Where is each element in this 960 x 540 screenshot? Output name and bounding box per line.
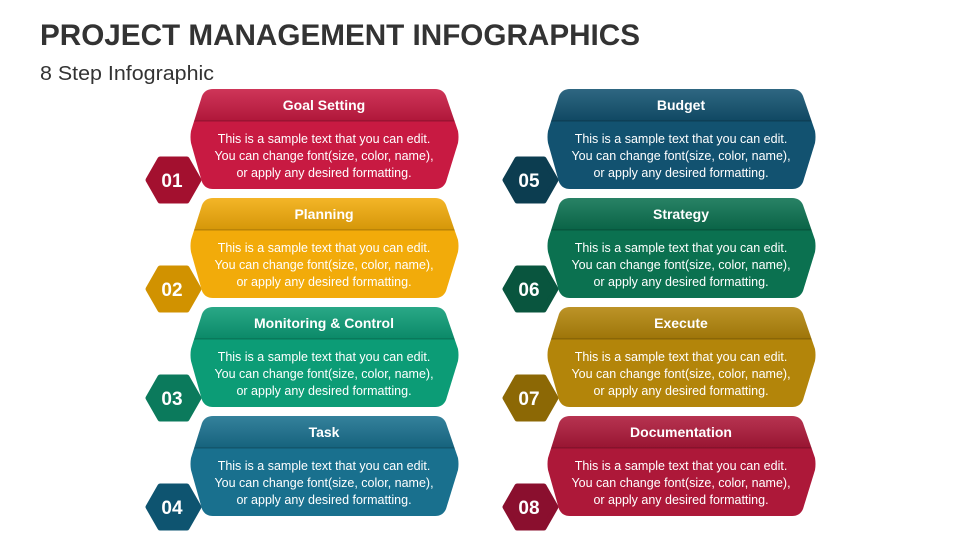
step 05: Budget: This is a sample text that you can edit. bbox=[575, 132, 787, 146]
step 02: Planning: Planning bbox=[294, 206, 354, 222]
step 05: Budget: Budget bbox=[657, 97, 705, 113]
step 03: Monitoring & Control: 03 bbox=[161, 389, 183, 410]
step 06: Strategy: or apply any desired formatting. bbox=[593, 275, 769, 289]
step 01: Goal Setting: or apply any desired formatting. bbox=[236, 166, 412, 180]
step 03: Monitoring & Control: or apply any desired formatting. bbox=[236, 384, 412, 398]
step 08: Documentation: Documentation bbox=[630, 424, 732, 440]
step 01: Goal Setting bbox=[148, 89, 470, 201]
step 05: Budget: You can change font(size, color, name), bbox=[571, 149, 791, 163]
step 04: Task bbox=[148, 416, 470, 528]
step 03: Monitoring & Control bbox=[148, 307, 470, 419]
step 06: Strategy: This is a sample text that you can edit. bbox=[575, 241, 787, 255]
step 07: Execute bbox=[505, 307, 827, 419]
step 08: Documentation bbox=[505, 416, 827, 528]
step 02: Planning: This is a sample text that you can edit. bbox=[218, 241, 430, 255]
step 06: Strategy: Strategy bbox=[653, 206, 709, 222]
step 08: Documentation: You can change font(size, color, name), bbox=[571, 476, 791, 490]
step 02: Planning: 02 bbox=[161, 280, 183, 301]
step 06: Strategy: 06 bbox=[518, 280, 540, 301]
subtitle: 8 Step Infographic bbox=[40, 63, 214, 85]
step 02: Planning: or apply any desired formatting. bbox=[236, 275, 412, 289]
step 04: Task: This is a sample text that you can edit. bbox=[218, 459, 430, 473]
step 07: Execute: You can change font(size, color, name), bbox=[571, 367, 791, 381]
step 04: Task: 04 bbox=[161, 498, 183, 519]
step 02: Planning bbox=[148, 198, 470, 310]
step 07: Execute: This is a sample text that you can edit. bbox=[575, 350, 787, 364]
step 03: Monitoring & Control: You can change font(size, color, name), bbox=[214, 367, 434, 381]
step 01: Goal Setting: This is a sample text that you can edit. bbox=[218, 132, 430, 146]
step 04: Task: Task bbox=[309, 424, 340, 440]
step 04: Task: or apply any desired formatting. bbox=[236, 493, 412, 507]
step 08: Documentation: or apply any desired formatting. bbox=[593, 493, 769, 507]
title: PROJECT MANAGEMENT INFOGRAPHICS bbox=[40, 19, 640, 52]
step 05: Budget: or apply any desired formatting. bbox=[593, 166, 769, 180]
step 03: Monitoring & Control: Monitoring & Control bbox=[254, 315, 394, 331]
step 04: Task: You can change font(size, color, name), bbox=[214, 476, 434, 490]
step 05: Budget bbox=[505, 89, 827, 201]
step 01: Goal Setting: You can change font(size, color, name), bbox=[214, 149, 434, 163]
step 07: Execute: or apply any desired formatting. bbox=[593, 384, 769, 398]
step 05: Budget: 05 bbox=[518, 171, 540, 192]
step 07: Execute: 07 bbox=[518, 389, 540, 410]
step 03: Monitoring & Control: This is a sample text that you can edit. bbox=[218, 350, 430, 364]
step 06: Strategy: You can change font(size, color, name), bbox=[571, 258, 791, 272]
step 02: Planning: You can change font(size, color, name), bbox=[214, 258, 434, 272]
step 06: Strategy bbox=[505, 198, 827, 310]
step 07: Execute: Execute bbox=[654, 315, 708, 331]
step 08: Documentation: 08 bbox=[518, 498, 540, 519]
step 08: Documentation: This is a sample text that you can edit. bbox=[575, 459, 787, 473]
step 01: Goal Setting: 01 bbox=[161, 171, 183, 192]
step 01: Goal Setting: Goal Setting bbox=[283, 97, 365, 113]
